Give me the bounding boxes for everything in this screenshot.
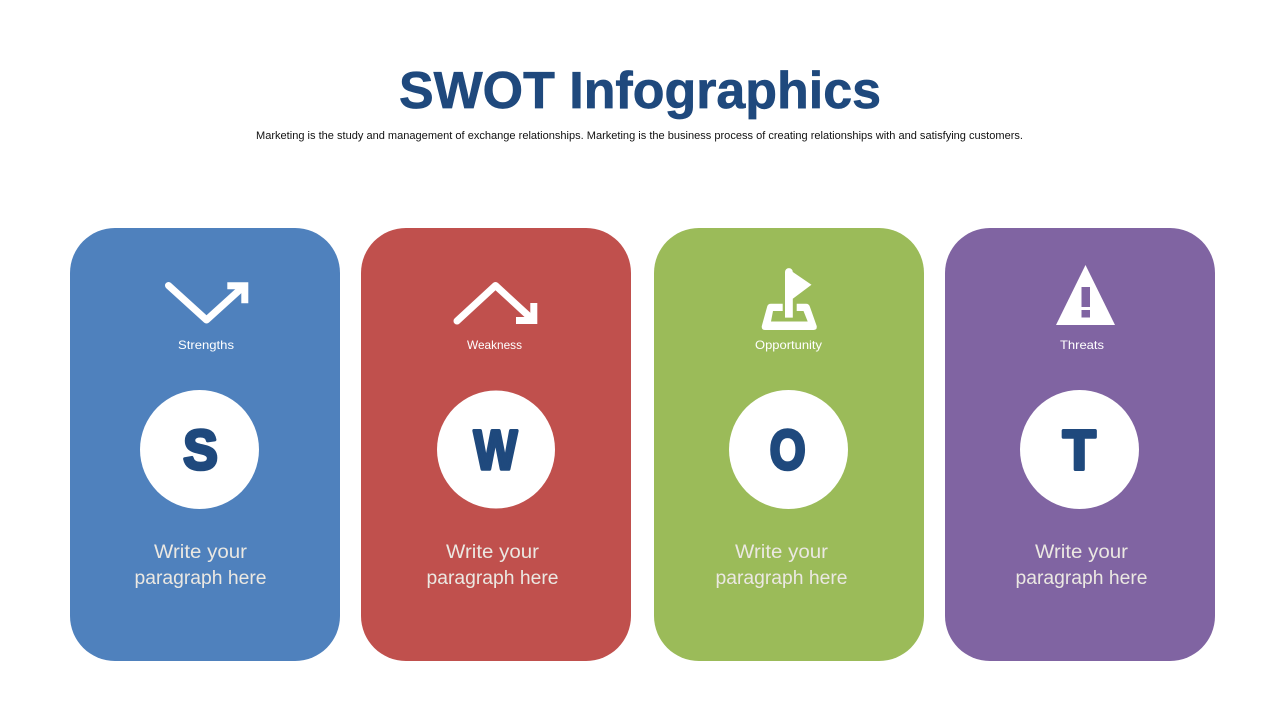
letter circle: O: O	[770, 418, 806, 481]
letter circle: S	[140, 390, 259, 509]
paragraph: opportunity: paragraph here	[716, 568, 848, 589]
panel: opportunity	[654, 228, 924, 661]
label: weakness: Weakness	[467, 338, 522, 352]
paragraph: weakness: paragraph here	[426, 568, 558, 589]
paragraph: threats: paragraph here	[1016, 568, 1148, 589]
icon: warning triangle	[1056, 265, 1115, 325]
letter circle: W: W	[474, 418, 517, 481]
icon: rising arrow	[168, 286, 245, 320]
letter circle: O	[729, 390, 848, 509]
letter circle: W	[437, 390, 555, 508]
card background: opportunity	[654, 228, 924, 661]
icon: falling arrow	[457, 286, 534, 321]
label: strengths: Strengths	[178, 338, 234, 352]
card background: threats	[945, 228, 1215, 661]
card background: strengths	[70, 228, 340, 661]
label: opportunity: Opportunity	[755, 338, 822, 352]
letter circle: T: T	[1063, 418, 1096, 481]
paragraph: threats: Write your	[1035, 542, 1129, 563]
paragraph: weakness	[426, 542, 558, 589]
letter circle: S: S	[183, 418, 218, 481]
subtitle text: Marketing is the study and management of exchange relationships. Marketing is the business process of creating relationships with and satisfying customers.	[256, 130, 1023, 142]
panel: threats	[945, 228, 1215, 661]
title: SWOT Infographics	[399, 62, 881, 120]
card background: weakness	[361, 228, 631, 661]
panel: strengths	[70, 228, 340, 661]
paragraph: strengths: paragraph here	[134, 568, 266, 589]
paragraph: strengths	[134, 542, 266, 589]
paragraph: opportunity	[716, 542, 848, 589]
paragraph: opportunity: Write your	[735, 542, 829, 563]
icon: flag on base	[762, 268, 817, 330]
paragraph: threats	[1016, 542, 1148, 589]
label: threats: Threats	[1060, 338, 1104, 352]
paragraph: strengths: Write your	[154, 542, 248, 563]
letter circle: T	[1020, 390, 1139, 509]
panel: weakness	[361, 228, 631, 661]
paragraph: weakness: Write your	[446, 542, 540, 563]
